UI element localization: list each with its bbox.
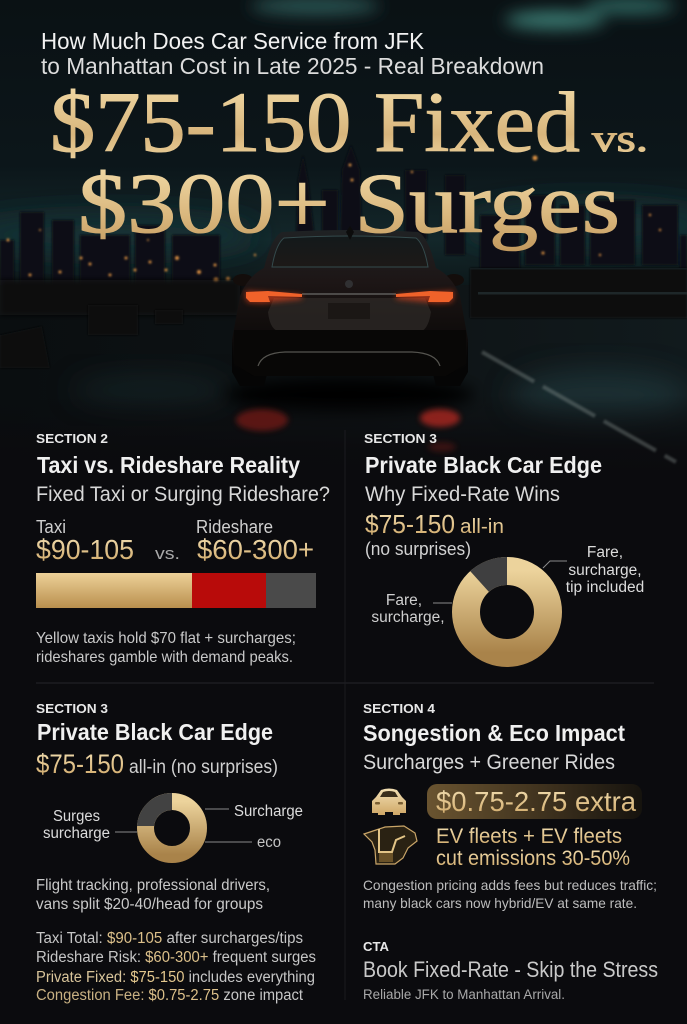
CTA label: CTA	[363, 940, 389, 954]
price summary list: Taxi Total: $90-105 after surcharges/tips	[36, 930, 303, 947]
CTA supporting line: Reliable JFK to Manhattan Arrival.	[363, 987, 565, 1002]
donut labels: surcharge	[43, 825, 110, 842]
donut label right	[543, 544, 644, 596]
price: $75-150	[36, 749, 124, 779]
description: Flight tracking, professional drivers,	[36, 877, 270, 894]
title: main gold headline	[50, 74, 648, 251]
price summary list: Congestion Fee: $0.75-2.75 zone impact	[36, 987, 304, 1004]
price	[365, 509, 504, 559]
hero: night city road scene	[0, 0, 687, 475]
description	[363, 877, 657, 911]
subheading: Why Fixed-Rate Wins	[365, 483, 560, 506]
price: $75-150	[365, 509, 455, 539]
title: main gold headline: vs.	[592, 118, 648, 160]
donut chart	[137, 793, 198, 854]
price: all-in (no surprises)	[129, 757, 278, 778]
rideshare price: $60-300+	[197, 534, 314, 565]
donut label right: surcharge,	[568, 562, 642, 579]
subheading: Fixed Taxi or Surging Rideshare?	[36, 483, 330, 506]
section label: SECTION 3	[36, 702, 108, 716]
panel: congestion and eco impact	[363, 702, 657, 911]
description: many black cars now hybrid/EV at same rate.	[363, 895, 637, 911]
description: vans split $20-40/head for groups	[36, 896, 263, 913]
price	[36, 749, 278, 779]
heading: Private Black Car Edge	[37, 719, 273, 745]
taxi price: Taxi	[36, 517, 66, 537]
section label: SECTION 3	[364, 432, 437, 446]
vs label: vs.	[155, 544, 180, 563]
panel: call to action	[363, 940, 658, 1002]
price summary list: Rideshare Risk: $60-300+ frequent surges	[36, 949, 316, 966]
dividers	[36, 430, 654, 1000]
heading: Taxi vs. Rideshare Reality	[37, 452, 300, 478]
donut label right: tip included	[566, 579, 644, 596]
rideshare price	[196, 517, 314, 565]
title: subtitle question: How Much Does Car Service from JFK	[41, 28, 425, 54]
panel: private black car edge, why fixed rate wins	[364, 432, 644, 653]
eco callout	[436, 825, 630, 870]
price: all-in	[460, 516, 504, 538]
donut labels: eco	[257, 834, 281, 851]
price: (no surprises)	[365, 539, 471, 559]
heading: Songestion & Eco Impact	[363, 720, 625, 746]
section label: SECTION 4	[363, 702, 435, 716]
donut label left: Fare,	[386, 592, 422, 609]
donut label right: Fare,	[587, 544, 623, 561]
price summary list: Private Fixed: $75-150 includes everything	[36, 969, 315, 986]
panel: private black car edge, details	[36, 702, 316, 1004]
section label: SECTION 2	[36, 432, 108, 446]
donut label left	[371, 592, 452, 626]
taxi price: $90-105	[36, 534, 134, 565]
price summary list	[36, 930, 316, 1004]
donut labels: Surges	[53, 808, 100, 825]
donut label left: surcharge,	[371, 609, 445, 626]
title: subtitle question: to Manhattan Cost in Late 2025 - Real Breakdown	[41, 53, 544, 79]
subheading: Surcharges + Greener Rides	[363, 751, 615, 774]
eco callout: EV fleets + EV fleets	[436, 825, 622, 848]
icon: gold zone map	[364, 826, 417, 864]
callout: extra fee pill: $0.75-2.75 extra	[436, 786, 636, 817]
donut labels: Surcharge	[234, 803, 303, 820]
heading: Private Black Car Edge	[365, 452, 602, 478]
stacked bar chart	[36, 573, 316, 608]
title: subtitle question	[41, 28, 544, 79]
taxi price	[36, 517, 134, 565]
panel: taxi vs rideshare	[36, 432, 330, 666]
donut chart	[466, 557, 548, 653]
title: main gold headline: $75-150 Fixed	[50, 74, 580, 170]
eco callout: cut emissions 30-50%	[436, 847, 630, 870]
description: rideshares gamble with demand peaks.	[36, 649, 293, 666]
icon: gold car	[372, 788, 406, 815]
description	[36, 877, 270, 913]
description: Yellow taxis hold $70 flat + surcharges;	[36, 630, 296, 647]
icon: black car rear view	[232, 226, 468, 386]
description	[36, 630, 296, 666]
donut labels	[43, 803, 303, 851]
rideshare price: Rideshare	[196, 517, 273, 537]
title: main gold headline: $300+ Surges	[78, 155, 620, 251]
description: Congestion pricing adds fees but reduces traffic;	[363, 877, 657, 893]
